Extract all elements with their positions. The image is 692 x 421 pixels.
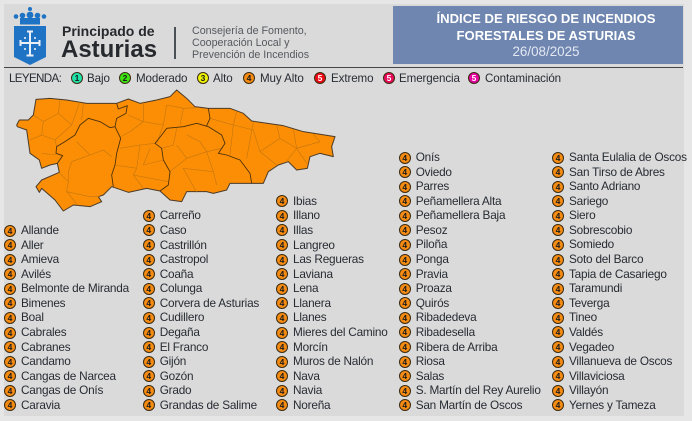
logo: Principado de Asturias	[14, 7, 157, 65]
municipality column 5: 4	[556, 225, 560, 235]
municipality column 2: El Franco	[160, 340, 208, 354]
department name: Consejería de Fomento,	[192, 25, 307, 37]
municipality column 3: Llanera	[293, 296, 331, 310]
municipality column 1: Caravia	[21, 398, 60, 412]
municipality column 5: 4	[556, 182, 560, 192]
municipality column 5: Somiedo	[569, 237, 614, 251]
municipality column 2: Colunga	[160, 281, 202, 295]
municipality column 1: Aller	[21, 238, 44, 252]
municipality column 4: 4	[402, 269, 407, 279]
municipality column 3: Las Regueras	[293, 252, 364, 266]
department name: Prevención de Incendios	[192, 49, 309, 61]
title panel: FORESTALES DE ASTURIAS	[457, 28, 635, 42]
municipality column 4	[399, 150, 541, 412]
municipality column 4: Ponga	[416, 252, 449, 266]
municipality column 3: Laviana	[293, 267, 333, 281]
municipality column 5: Taramundi	[569, 281, 622, 295]
municipality column 4: 4	[402, 327, 407, 337]
municipality column 3: 4	[280, 400, 284, 410]
municipality column 2: 4	[146, 269, 151, 279]
municipality column 2: Gijón	[160, 354, 186, 368]
municipality column 4: 4	[402, 167, 407, 177]
municipality column 1: Belmonte de Miranda	[21, 281, 129, 295]
municipality column 5: Villaviciosa	[569, 369, 624, 383]
municipality column 1: 4	[8, 357, 12, 367]
municipality column 1: Candamo	[21, 354, 71, 368]
municipality column 2: Coaña	[160, 267, 193, 281]
municipality column 2: 4	[146, 371, 151, 381]
municipality column 2: Corvera de Asturias	[160, 296, 259, 310]
municipality column 5: Tineo	[569, 310, 597, 324]
municipality column 3: Noreña	[293, 398, 330, 412]
municipality column 4: Proaza	[416, 281, 452, 295]
municipality column 1: 4	[8, 255, 12, 265]
municipality column 5: Sobrescobio	[569, 223, 632, 237]
municipality column 5: 4	[556, 284, 560, 294]
municipality column 5: Siero	[569, 208, 595, 222]
municipality column 5: 4	[556, 240, 560, 250]
municipality column 3: 4	[280, 240, 284, 250]
municipality column 4: Peñamellera Alta	[416, 194, 501, 208]
municipality column 4: 4	[402, 225, 407, 235]
municipality column 4: 4	[402, 400, 407, 410]
municipality column 1: Cangas de Onís	[21, 383, 103, 397]
municipality column 5: Tapia de Casariego	[569, 267, 667, 281]
legend item: Contaminación: 5	[472, 73, 476, 83]
municipality column 5: Valdés	[569, 325, 603, 339]
municipality column 2	[143, 208, 259, 412]
municipality column 4: 4	[402, 386, 407, 396]
legend item: Emergencia: 5	[387, 73, 391, 83]
legend item: Moderado: 2	[123, 73, 127, 83]
municipality column 2: 4	[146, 255, 151, 265]
municipality column 5: Teverga	[569, 296, 609, 310]
municipality column 3: Lena	[293, 281, 318, 295]
logo wordmark: Principado de	[62, 23, 155, 39]
divider	[174, 27, 176, 59]
municipality column 5: Soto del Barco	[569, 252, 643, 266]
municipality column 2: 4	[146, 298, 151, 308]
municipality column 1: 4	[8, 371, 12, 381]
municipality column 2: 4	[146, 328, 151, 338]
municipality column 4: 4	[402, 211, 407, 221]
municipality column 1: 4	[8, 400, 12, 410]
municipality column 2: 4	[146, 313, 151, 323]
legend item: Muy Alto: 4	[247, 73, 251, 83]
municipality column 3: 4	[280, 284, 284, 294]
municipality column 2: Carreño	[160, 208, 201, 222]
municipality column 4: Ribadedeva	[416, 310, 476, 324]
municipality column 4: 4	[402, 298, 407, 308]
municipality column 2: 4	[146, 357, 151, 367]
legend item: Muy Alto: Muy Alto	[260, 72, 304, 84]
municipality column 4: 4	[402, 152, 407, 162]
municipality column 4: Ribera de Arriba	[416, 340, 497, 354]
legend item: Emergencia: Emergencia	[399, 72, 460, 84]
department name	[192, 25, 309, 61]
municipality column 3: Langreo	[293, 238, 335, 252]
map of Asturias	[16, 90, 336, 212]
municipality column 1: 4	[8, 328, 12, 338]
title panel: ÍNDICE DE RIESGO DE INCENDIOS	[436, 11, 656, 26]
municipality column 5: 4	[556, 298, 560, 308]
legend item: Moderado: Moderado	[136, 72, 187, 84]
municipality column 5: 4	[556, 371, 560, 381]
map fill	[17, 90, 335, 211]
municipality column 5: 4	[556, 269, 560, 279]
municipality column 1: 4	[8, 226, 12, 236]
municipality column 3: Mieres del Camino	[293, 325, 388, 339]
legend item: Extremo: 5	[318, 73, 322, 83]
legend item: Contaminación: Contaminación	[485, 72, 561, 84]
municipality column 4: Onís	[416, 150, 440, 164]
municipality column 4: 4	[402, 240, 407, 250]
municipality column 4: Oviedo	[416, 165, 452, 179]
municipality column 5: 4	[556, 196, 560, 206]
council area boundaries	[56, 103, 252, 191]
municipality column 2: Cudillero	[160, 310, 204, 324]
municipality column 4: S. Martín del Rey Aurelio	[416, 383, 541, 397]
municipality column 3: 4	[280, 328, 284, 338]
municipality column 5	[552, 150, 687, 412]
municipality column 2: Castropol	[160, 252, 208, 266]
municipality column 2: 4	[146, 284, 151, 294]
municipality column 5: 4	[556, 327, 560, 337]
municipality column 3: Illas	[293, 223, 313, 237]
legend item: Bajo	[71, 72, 110, 84]
municipality column 1: Avilés	[21, 267, 51, 281]
municipality column 4: Ribadesella	[416, 325, 475, 339]
legend item: Alto: Alto	[213, 72, 233, 84]
municipality column 3: 4	[280, 298, 284, 308]
municipality column 2: Caso	[160, 223, 186, 237]
legend	[9, 72, 561, 84]
municipal boundaries	[30, 100, 320, 206]
legend item: Alto: 3	[201, 73, 205, 83]
municipality column 4: 4	[402, 196, 407, 206]
municipality column 4: Quirós	[416, 296, 449, 310]
legend rule	[4, 67, 683, 68]
municipality column 4: 4	[402, 284, 407, 294]
municipality column 5: Vegadeo	[569, 340, 614, 354]
municipality column 3: Illano	[293, 208, 320, 222]
municipality column 3: 4	[280, 357, 284, 367]
municipality column 1: 4	[8, 284, 12, 294]
municipality column 5: 4	[556, 152, 560, 162]
legend item: Alto	[197, 72, 233, 84]
municipality column 4: 4	[402, 342, 407, 352]
municipality column 5: 4	[556, 357, 560, 367]
municipality column 1: 4	[8, 342, 12, 352]
municipality column 1: Cabranes	[21, 340, 70, 354]
municipality column 5: San Tirso de Abres	[569, 165, 665, 179]
municipality column 3: 4	[280, 313, 284, 323]
municipality column 3: 4	[280, 371, 284, 381]
municipality column 3: Llanes	[293, 310, 326, 324]
title panel: 26/08/2025	[512, 44, 580, 59]
municipality column 5: Santa Eulalia de Oscos	[569, 150, 687, 164]
municipality column 3	[276, 194, 388, 412]
municipality column 4: 4	[402, 357, 407, 367]
municipality column 3: Nava	[293, 369, 320, 383]
municipality column 4: 4	[402, 371, 407, 381]
municipality column 2: Gozón	[160, 369, 193, 383]
municipality column 5: Sariego	[569, 194, 608, 208]
legend title: LEYENDA:	[9, 72, 61, 84]
municipality column 3: Morcín	[293, 340, 328, 354]
municipality column 2: 4	[146, 342, 151, 352]
municipality column 3: 4	[280, 196, 284, 206]
municipality column 2: 4	[146, 400, 151, 410]
municipality column 1: 4	[8, 386, 12, 396]
municipality column 5: Villanueva de Oscos	[569, 354, 672, 368]
title panel	[393, 6, 683, 64]
municipality column 2: Grado	[160, 383, 191, 397]
municipality column 2: 4	[146, 225, 151, 235]
municipality column 3: 4	[280, 211, 284, 221]
municipality column 5: 4	[556, 255, 560, 265]
municipality column 1: Amieva	[21, 252, 59, 266]
municipality column 3: Muros de Nalón	[293, 354, 373, 368]
municipality column 3: Ibias	[293, 194, 317, 208]
municipality column 1: Boal	[21, 310, 44, 324]
municipality column 1	[4, 223, 130, 412]
municipality column 4: Piloña	[416, 237, 447, 251]
municipality column 3: 4	[280, 255, 284, 265]
municipality column 3: 4	[280, 342, 284, 352]
municipality column 4: Parres	[416, 179, 449, 193]
municipality column 2: 4	[146, 386, 151, 396]
municipality column 1: Allande	[21, 223, 59, 237]
municipality column 1: 4	[8, 313, 12, 323]
municipality column 1: 4	[8, 298, 12, 308]
municipality column 3: 4	[280, 225, 284, 235]
municipality column 5: 4	[556, 400, 560, 410]
legend item: Bajo: Bajo	[87, 72, 110, 84]
municipality column 1: Bimenes	[21, 296, 65, 310]
municipality column 4: Pesoz	[416, 223, 447, 237]
municipality column 4: 4	[402, 255, 407, 265]
department name: Cooperación Local y	[192, 37, 289, 49]
municipality column 2: Castrillón	[160, 238, 207, 252]
municipality column 5: 4	[556, 342, 560, 352]
logo: Principado de Asturias: Asturias	[61, 36, 157, 63]
municipality column 4: Pravia	[416, 267, 448, 281]
municipality column 5: Villayón	[569, 383, 608, 397]
municipality column 1: 4	[8, 240, 12, 250]
municipality column 3: 4	[280, 386, 284, 396]
municipality column 5: Yernes y Tameza	[569, 398, 656, 412]
municipality column 1: Cabrales	[21, 325, 66, 339]
icon: coat of arms shield	[14, 7, 46, 65]
municipality column 2: Grandas de Salime	[160, 398, 257, 412]
municipality column 5: 4	[556, 386, 560, 396]
municipality column 5: 4	[556, 211, 560, 221]
municipality column 5: 4	[556, 313, 560, 323]
municipality column 2: 4	[146, 240, 151, 250]
municipality column 1: 4	[8, 269, 12, 279]
legend item: Bajo: 1	[75, 73, 79, 83]
municipality column 5: Santo Adriano	[569, 179, 640, 193]
municipality column 2: Degaña	[160, 325, 200, 339]
municipality column 2: 4	[146, 211, 151, 221]
municipality column 4: Riosa	[416, 354, 445, 368]
municipality column 4: San Martín de Oscos	[416, 398, 522, 412]
municipality column 1: Cangas de Narcea	[21, 369, 116, 383]
municipality column 4: 4	[402, 313, 407, 323]
municipality column 4: Salas	[416, 369, 444, 383]
municipality column 4: 4	[402, 182, 407, 192]
municipality column 3: Navia	[293, 383, 322, 397]
municipality column 4: Peñamellera Baja	[416, 208, 505, 222]
municipality column 3: 4	[280, 269, 284, 279]
municipality column 5: 4	[556, 167, 560, 177]
legend item: Extremo: Extremo	[331, 72, 373, 84]
